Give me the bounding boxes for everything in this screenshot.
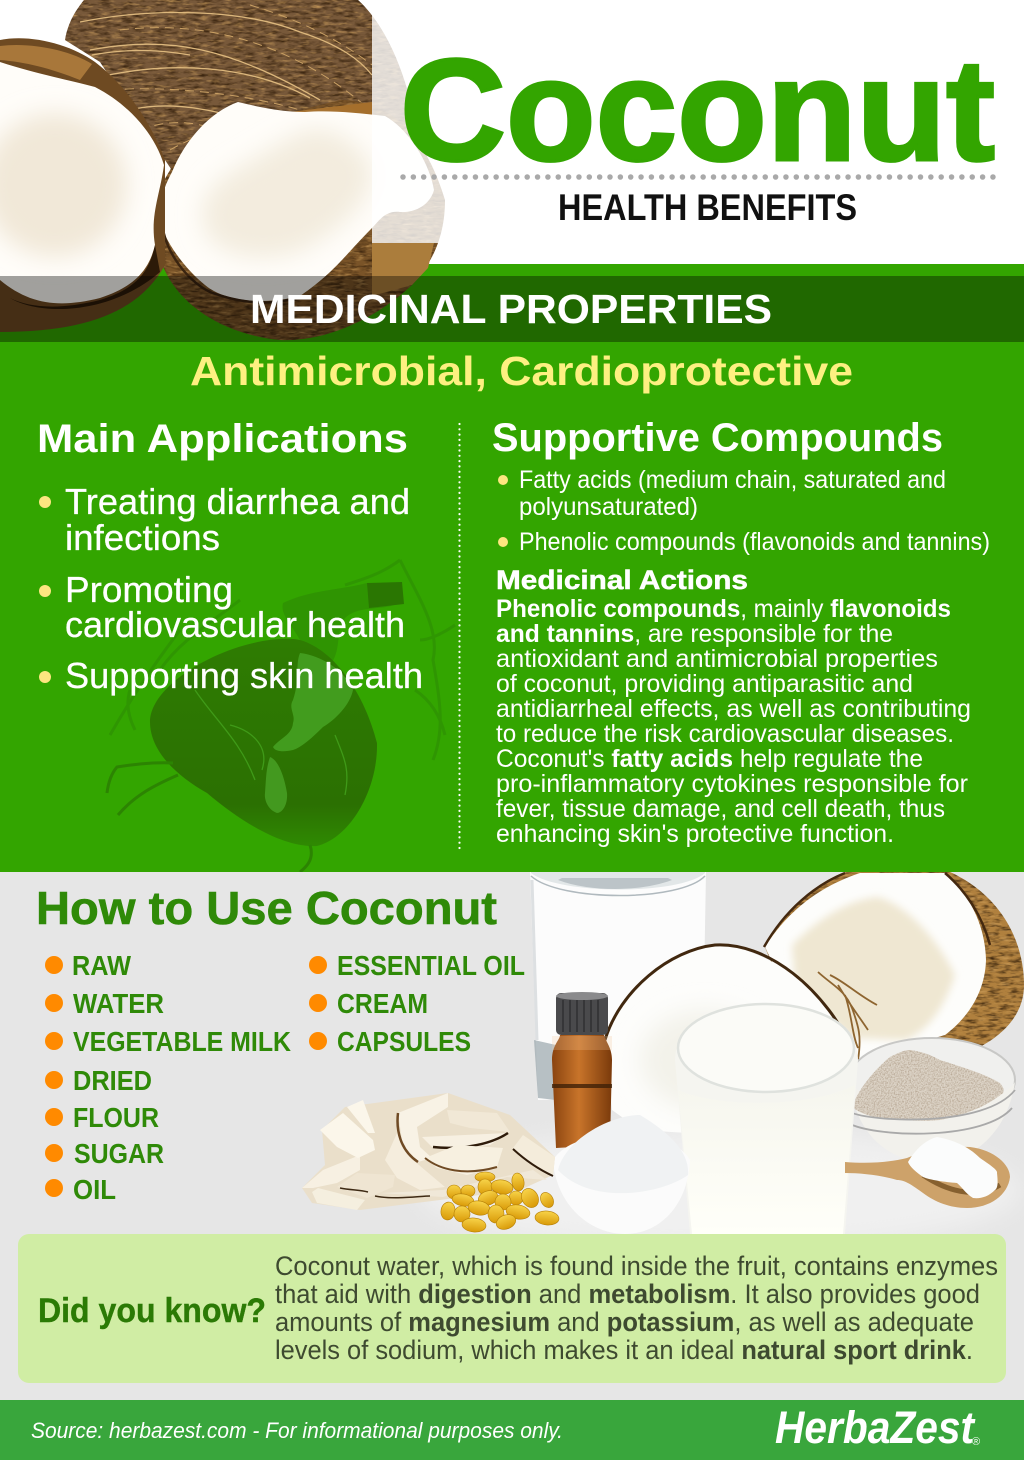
right coconut half <box>153 100 445 340</box>
upper coconut half <box>764 872 1024 1060</box>
callout text <box>275 1251 998 1365</box>
list item: diarrhea: infections <box>65 517 220 558</box>
heading: how to use coconut: How to Use Coconut <box>36 882 497 934</box>
source note: Source: herbazest.com - For informational purposes only. <box>31 1418 563 1443</box>
callout heading: Did you know? <box>38 1292 266 1330</box>
usage list: column two: CAPSULES <box>337 1026 471 1057</box>
title <box>400 29 995 228</box>
list item: diarrhea <box>39 481 410 558</box>
list item: cardiovascular <box>39 569 405 645</box>
glass of milk <box>675 1004 858 1234</box>
text block: medicinal actions: pro-inflammatory cytokines responsible for <box>496 770 968 798</box>
callout text: Coconut water, which is found inside the fruit, contains enzymes <box>275 1251 998 1281</box>
lower coconut half <box>605 945 877 1140</box>
subheading: antimicrobial, cardioprotective: Antimicrobial, Cardioprotective <box>190 348 853 394</box>
heading: medicinal properties: MEDICINAL PROPERTIES <box>250 286 772 332</box>
text block: medicinal actions: Phenolic compounds, mainly flavonoids <box>496 595 951 623</box>
dotted divider <box>403 174 995 180</box>
panel: medicinal properties background <box>0 264 1024 872</box>
heading: main applications: Main Applications <box>37 417 408 461</box>
usage list: column one: RAW <box>72 950 132 981</box>
list item: fatty acids: polyunsaturated) <box>519 493 698 521</box>
footer bar <box>0 1400 1024 1460</box>
text block: medicinal actions: Coconut's fatty acids help regulate the <box>496 745 923 773</box>
registered mark: ® <box>972 1436 980 1448</box>
list item: fatty acids <box>498 466 946 521</box>
left coconut half <box>0 38 165 332</box>
usage list: column one <box>45 950 291 1205</box>
list item: phenolic compounds: Phenolic compounds (flavonoids and tannins) <box>519 528 990 556</box>
panel: main applications <box>37 417 423 696</box>
list item: diarrhea: Treating diarrhea and <box>65 481 410 522</box>
wooden spoon with coconut oil <box>845 1137 1010 1208</box>
callout text: amounts of magnesium and potassium, as well as adequate <box>275 1307 974 1337</box>
usage list: column two <box>309 950 525 1057</box>
logo: HerbaZest: HerbaZest <box>775 1402 976 1453</box>
panel: supportive compounds <box>492 416 990 848</box>
medicinal properties band <box>0 276 1024 342</box>
icon: heart illustration <box>107 560 455 872</box>
cream bowl <box>553 1115 690 1234</box>
capsules <box>440 1172 560 1233</box>
faded coconut overlay <box>372 0 446 243</box>
flour bowl <box>849 1038 1015 1163</box>
usage list: column one: SUGAR <box>74 1138 164 1169</box>
text block: medicinal actions: antidiarrheal effects, as well as contributing <box>496 695 971 723</box>
callout text: that aid with digestion and metabolism. It also provides good <box>275 1279 980 1309</box>
usage list: column one: VEGETABLE MILK <box>73 1026 291 1057</box>
callout: did you know <box>18 1234 1006 1383</box>
panel: how to use background <box>0 872 1024 1400</box>
usage list: column one: OIL <box>73 1174 116 1205</box>
text block: medicinal actions <box>496 595 971 848</box>
panel: how to use coconut <box>36 882 525 1205</box>
text block: medicinal actions: to reduce the risk cardiovascular diseases. <box>496 720 954 748</box>
title: Coconut: Coconut <box>400 29 995 191</box>
dotted column divider <box>458 424 461 850</box>
text block: medicinal actions: antioxidant and antimicrobial properties <box>496 645 938 673</box>
image: coconuts <box>0 0 446 340</box>
subheading: medicinal actions: Medicinal Actions <box>496 565 748 595</box>
text block: medicinal actions: and tannins, are responsible for the <box>496 620 893 648</box>
usage list: column one: FLOUR <box>73 1102 159 1133</box>
list item: skin health: Supporting skin health <box>65 655 423 696</box>
usage list: column two: CREAM <box>337 988 428 1019</box>
list item: cardiovascular: cardiovascular health <box>65 604 405 645</box>
list item: fatty acids: Fatty acids (medium chain, saturated and <box>519 466 946 494</box>
soft floor light <box>420 1130 1020 1250</box>
footer <box>0 1400 1024 1460</box>
back coconut husk <box>65 0 428 175</box>
callout text: levels of sodium, which makes it an ideal natural sport drink. <box>275 1335 973 1365</box>
subtitle: health benefits: HEALTH BENEFITS <box>558 187 857 228</box>
usage list: column one: DRIED <box>73 1065 152 1096</box>
text block: medicinal actions: of coconut, providing antiparasitic and <box>496 670 913 698</box>
image: coconut products <box>302 872 1024 1250</box>
heading: supportive compounds: Supportive Compounds <box>492 416 943 460</box>
essential oil bottle <box>552 992 612 1148</box>
water glass <box>530 872 706 1100</box>
callout background <box>18 1234 1006 1383</box>
text block: medicinal actions: enhancing skin's protective function. <box>496 820 894 848</box>
usage list: column two: ESSENTIAL OIL <box>337 950 525 981</box>
text block: medicinal actions: fever, tissue damage, and cell death, thus <box>496 795 945 823</box>
coconut flakes <box>302 1093 555 1210</box>
usage list: column one: WATER <box>73 988 164 1019</box>
list item: cardiovascular: Promoting <box>65 569 233 610</box>
